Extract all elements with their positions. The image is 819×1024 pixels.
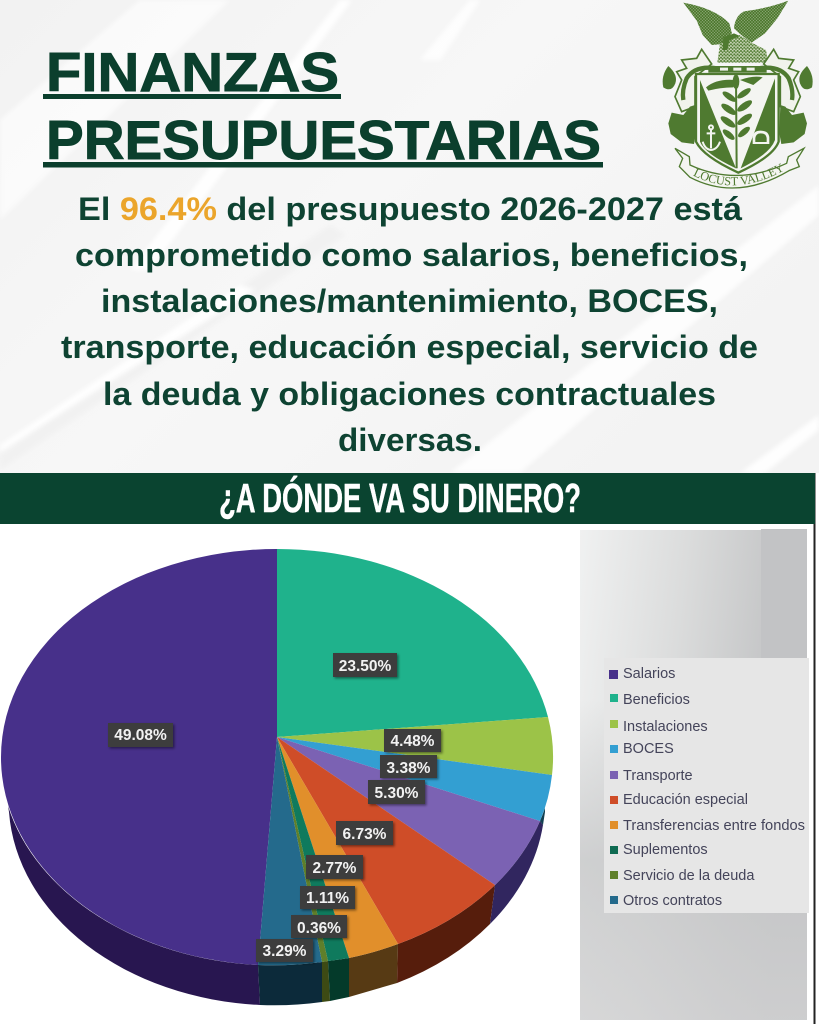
label: 3.38%	[380, 755, 437, 778]
label: 4.48%: 4.48%	[391, 733, 435, 750]
paragraph: budget statement: la deuda y obligaciones contractuales	[103, 376, 716, 412]
slice: Instalaciones	[277, 717, 553, 775]
legend: Beneficios: Beneficios	[623, 692, 690, 708]
panel: legend	[580, 529, 809, 1020]
label: 6.73%	[336, 821, 393, 845]
slice: Otros contratos	[258, 737, 322, 965]
label: 5.30%	[368, 780, 425, 804]
pie side wall	[8, 806, 545, 1005]
mantling	[663, 49, 813, 144]
label: 2.77%	[306, 855, 363, 879]
label: 49.08%	[108, 723, 173, 747]
legend: Educación especial: Educación especial	[623, 792, 748, 808]
label: 6.73%: 6.73%	[343, 826, 387, 843]
label: 0.36%: 0.36%	[297, 920, 341, 937]
label: 23.50%: 23.50%	[339, 658, 391, 675]
ribbon	[674, 146, 806, 189]
label: 0.36%	[291, 915, 347, 938]
slice: Suplementos	[277, 737, 349, 961]
dome	[753, 131, 769, 144]
legend: Transporte: Transporte	[623, 768, 693, 784]
paragraph: budget statement: transporte, educación especial, servicio de	[61, 329, 758, 365]
label: 2.77%: 2.77%	[313, 860, 357, 877]
banner heading	[0, 473, 815, 524]
legend: Salarios: Salarios	[623, 666, 675, 682]
paragraph: budget statement: comprometido como salarios, beneficios,	[75, 237, 748, 273]
legend: Servicio de la deuda: Servicio de la deuda	[623, 868, 755, 884]
label: 3.38%: 3.38%	[387, 760, 431, 777]
anchor	[703, 125, 720, 150]
label: 23.50%	[333, 653, 397, 677]
background	[0, 0, 819, 473]
banner heading: ¿A DÓNDE VA SU DINERO?	[219, 475, 581, 521]
legend: Transferencias entre fondos: Transferencias entre fondos	[623, 818, 805, 834]
legend: Instalaciones: Instalaciones	[623, 719, 708, 735]
slice: Transporte	[277, 737, 540, 885]
label: 49.08%: 49.08%	[114, 727, 167, 744]
paragraph: budget statement: El 96.4% del presupuesto 2026-2027 está	[78, 191, 742, 227]
title: PRESUPUESTARIAS	[46, 109, 601, 171]
slice: Beneficios	[277, 549, 548, 737]
title	[43, 41, 603, 171]
slice: Salarios	[1, 549, 277, 965]
shield	[696, 74, 779, 173]
icon: Locust Valley crest	[662, 0, 813, 189]
paragraph: budget statement: instalaciones/mantenimiento, BOCES,	[101, 283, 718, 319]
legend: BOCES: BOCES	[623, 741, 674, 757]
ribbon: LOCUST VALLEY	[693, 163, 782, 186]
slice: Educación especial	[277, 737, 495, 944]
label: 1.11%: 1.11%	[306, 890, 349, 907]
legend: Suplementos: Suplementos	[623, 842, 708, 858]
title: FINANZAS	[46, 41, 339, 103]
slice: Servicio de la deuda	[277, 737, 328, 962]
paragraph: budget statement	[61, 191, 758, 458]
slice: Transferencias entre fondos	[277, 737, 398, 958]
label: 4.48%	[384, 729, 441, 752]
eagle	[683, 1, 788, 63]
plant	[719, 74, 754, 168]
slice: BOCES	[277, 737, 552, 821]
chart background	[0, 473, 819, 1024]
label: 3.29%: 3.29%	[263, 943, 307, 960]
legend: Otros contratos: Otros contratos	[623, 893, 722, 909]
label: 3.29%	[256, 939, 313, 962]
pie chart	[1, 549, 553, 1005]
paragraph: budget statement: diversas.	[338, 422, 482, 458]
label: 1.11%	[300, 886, 355, 909]
label: 5.30%: 5.30%	[375, 785, 419, 802]
